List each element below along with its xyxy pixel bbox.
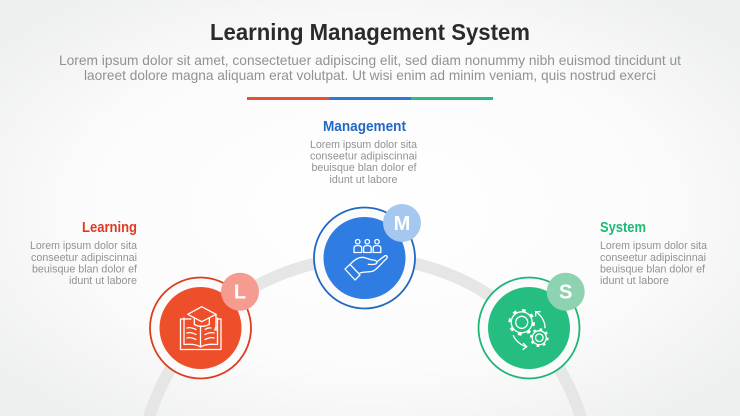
- body text: system: [600, 240, 707, 287]
- node: management: [314, 204, 421, 308]
- icon: gears with arrows: [510, 310, 548, 350]
- body text: management: beuisque blan dolor ef: [312, 162, 417, 174]
- arc connector: [143, 252, 587, 416]
- heading: system: System: [600, 219, 646, 236]
- node: learning: [150, 273, 259, 378]
- body text: learning: Lorem ipsum dolor sita: [30, 240, 137, 252]
- title: Learning Management System: [210, 19, 530, 45]
- heading: management: Management: [323, 118, 406, 135]
- badge: L: L: [234, 282, 246, 304]
- body text: management: [310, 139, 417, 186]
- body text: management: Lorem ipsum dolor sita: [310, 139, 417, 151]
- body text: management: conseetur adipiscinnai: [310, 150, 417, 162]
- badge: S: S: [559, 282, 572, 304]
- heading: learning: Learning: [82, 219, 137, 236]
- panel: learning text: [30, 219, 137, 287]
- body text: system: idunt ut labore: [600, 275, 669, 287]
- icon: book with graduation cap: [180, 307, 221, 350]
- subtitle text: laoreet dolore magna aliquam erat volutpat. Ut wisi enim ad minim veniam, quis nostrud exerci: [84, 68, 656, 83]
- tricolor divider: [247, 97, 493, 100]
- subtitle text: Lorem ipsum dolor sit amet, consectetuer adipiscing elit, sed diam nonummy nibh euismod tincidunt ut: [59, 53, 681, 68]
- body text: learning: beuisque blan dolor ef: [32, 264, 137, 276]
- subtitle text: [59, 53, 681, 83]
- panel: management text: [310, 118, 417, 186]
- body text: learning: conseetur adipiscinnai: [31, 252, 137, 264]
- body text: system: beuisque blan dolor ef: [600, 264, 705, 276]
- icon: hand holding people: [345, 240, 387, 280]
- badge: M: M: [394, 213, 410, 235]
- body text: system: conseetur adipiscinnai: [600, 252, 706, 264]
- body text: management: idunt ut labore: [330, 174, 398, 186]
- body text: learning: idunt ut labore: [69, 275, 137, 287]
- node: system: [478, 273, 585, 378]
- body text: system: Lorem ipsum dolor sita: [600, 240, 707, 252]
- panel: system text: [600, 219, 707, 287]
- body text: learning: [30, 240, 137, 287]
